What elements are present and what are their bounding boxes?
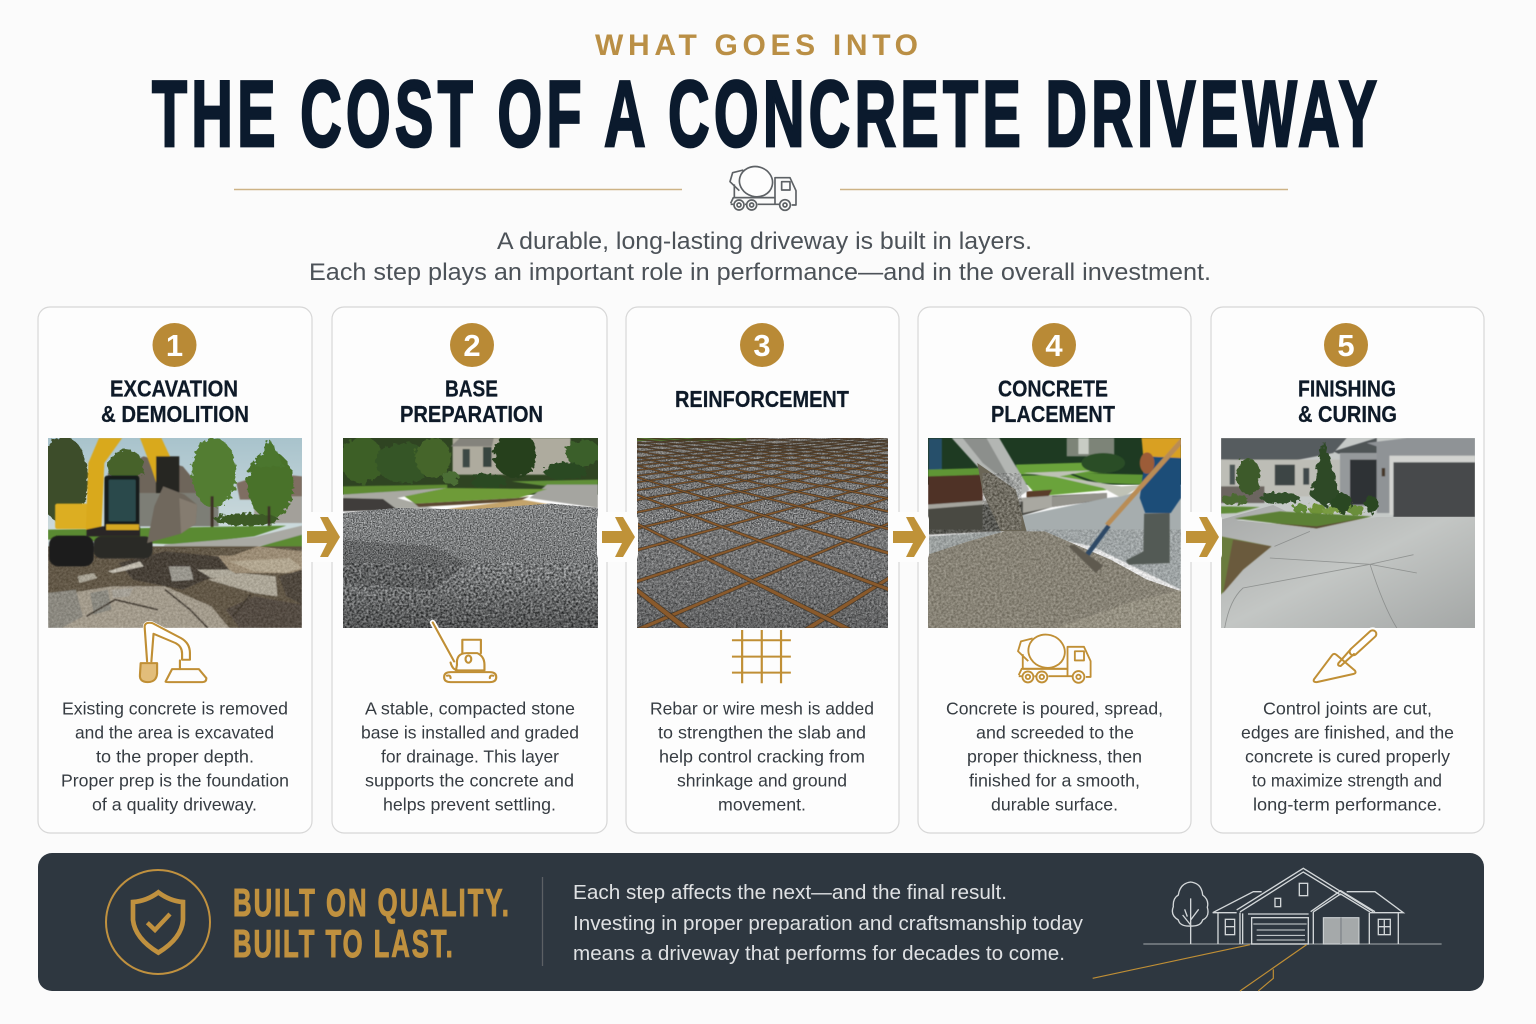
illustration: house line drawing (1093, 868, 1442, 991)
step number 4: 4 (1045, 328, 1063, 363)
description (361, 698, 579, 814)
arrow: step 4 to 5 (1181, 512, 1222, 562)
banner text: Investing in proper preparation and craftsmanship today (573, 912, 1084, 935)
photo: excavator breaking concrete (48, 438, 302, 628)
banner text (573, 881, 1084, 965)
banner heading (233, 882, 509, 966)
heading: base preparation: BASE (445, 376, 498, 402)
panel: step 1 excavation (38, 307, 312, 833)
icon: excavator (140, 623, 206, 682)
icon: mixer truck (730, 163, 796, 210)
arrow: step 3 to 4 (888, 512, 929, 562)
icon: mixer truck (1018, 631, 1091, 683)
heading: reinforcement: REINFORCEMENT (675, 386, 849, 412)
step number 5 (1324, 323, 1368, 367)
description: helps prevent settling. (383, 794, 556, 814)
description: A stable, compacted stone (365, 698, 575, 718)
panel: step 4 concrete placement (918, 307, 1191, 833)
description: for drainage. This layer (381, 746, 559, 766)
heading: excavation and demolition: & DEMOLITION (101, 401, 249, 427)
banner heading: BUILT TO LAST. (233, 923, 453, 966)
banner: built on quality (38, 853, 1484, 991)
description: Control joints are cut, (1263, 698, 1432, 718)
description: durable surface. (991, 794, 1118, 814)
heading: excavation and demolition (101, 376, 249, 427)
intro text: Each step plays an important role in performance—and in the overall investment. (309, 259, 1211, 286)
description: Rebar or wire mesh is added (650, 698, 874, 718)
photo: compacted gravel base (343, 438, 598, 628)
banner text: means a driveway that performs for decades to come. (573, 942, 1065, 965)
arrow: step 1 to 2 (302, 512, 343, 562)
heading: finishing and curing: FINISHING (1298, 376, 1396, 402)
banner text: Each step affects the next—and the final result. (573, 881, 1007, 904)
description (1241, 698, 1454, 814)
panel: step 2 base preparation (332, 307, 607, 833)
heading: excavation and demolition: EXCAVATION (110, 376, 238, 402)
description: Concrete is poured, spread, (946, 698, 1163, 718)
step number 1 (152, 323, 196, 367)
banner heading: BUILT ON QUALITY. (233, 882, 509, 925)
icon: trowel (1314, 634, 1373, 682)
heading: finishing and curing (1298, 376, 1397, 427)
description: supports the concrete and (365, 770, 574, 790)
icon: rebar grid (732, 630, 791, 683)
heading: finishing and curing: & CURING (1298, 401, 1397, 427)
description (946, 698, 1163, 814)
step number 2: 2 (463, 328, 481, 363)
panel: step 3 reinforcement (0, 307, 1536, 833)
step number 1: 1 (166, 328, 183, 363)
description (650, 698, 874, 814)
description: and screeded to the (976, 722, 1134, 742)
arrow: step 2 to 3 (597, 512, 638, 562)
description: base is installed and graded (361, 722, 579, 742)
description: concrete is cured properly (1245, 746, 1450, 766)
description: edges are finished, and the (1241, 722, 1454, 742)
heading: base preparation: PREPARATION (400, 401, 543, 427)
icon: plate compactor (433, 622, 496, 682)
description: Proper prep is the foundation (61, 770, 289, 790)
intro text (309, 228, 1211, 286)
description: to the proper depth. (96, 746, 254, 766)
heading: concrete placement: CONCRETE (998, 376, 1108, 402)
description (61, 698, 289, 814)
description: to maximize strength and (1252, 770, 1442, 790)
panel: step 5 finishing and curing (1211, 307, 1484, 833)
description: long-term performance. (1253, 794, 1442, 814)
description: and the area is excavated (75, 722, 274, 742)
step number 2 (450, 323, 494, 367)
photo: finished driveway (1221, 438, 1475, 628)
description: of a quality driveway. (92, 794, 257, 814)
description: to strengthen the slab and (658, 722, 866, 742)
heading: concrete placement (991, 376, 1115, 427)
heading: base preparation (400, 376, 543, 427)
description: movement. (718, 794, 806, 814)
step number 5: 5 (1337, 328, 1355, 363)
title: THE COST OF A CONCRETE DRIVEWAY (152, 63, 1377, 167)
description: Existing concrete is removed (62, 698, 288, 718)
step number 4 (1032, 323, 1076, 367)
step number 3: 3 (753, 328, 771, 363)
description: finished for a smooth, (969, 770, 1140, 790)
heading: concrete placement: PLACEMENT (991, 401, 1115, 427)
photo: pouring concrete (928, 438, 1181, 628)
photo: rebar mesh over gravel (637, 438, 888, 628)
icon: shield badge (106, 870, 210, 974)
step number 3 (740, 323, 784, 367)
description: shrinkage and ground (677, 770, 847, 790)
description: help control cracking from (659, 746, 865, 766)
description: proper thickness, then (967, 746, 1142, 766)
divider with truck icon (234, 163, 1288, 210)
intro text: A durable, long-lasting driveway is built in layers. (497, 228, 1032, 255)
eyebrow heading: WHAT GOES INTO (595, 29, 918, 62)
